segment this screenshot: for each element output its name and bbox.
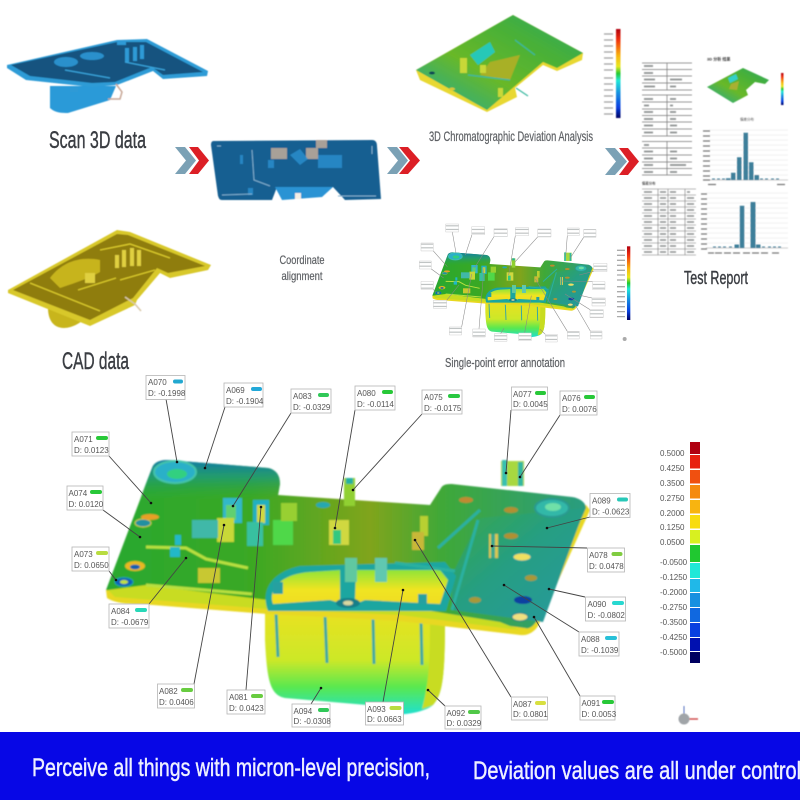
callout: A088 <box>503 584 619 656</box>
table: distribution <box>642 189 696 255</box>
callout: A082 <box>158 524 225 708</box>
chart: main deviation model <box>106 460 590 714</box>
banner <box>0 732 800 800</box>
callout: A073: D: 0.0650 <box>74 561 109 570</box>
scale labels: 0.2750 <box>660 494 685 503</box>
callout: A078: D: 0.0478 <box>589 562 624 571</box>
label: Coordinate alignment: Coordinate <box>280 253 325 267</box>
icon: coordinate triad <box>678 706 698 724</box>
callout: A087: D: 0.0801 <box>513 710 548 719</box>
callout: A083: D: -0.0329 <box>293 403 331 412</box>
callout: A073 <box>72 547 117 581</box>
callout: A082: A082 <box>159 687 178 696</box>
scale labels: -0.2750 <box>660 603 688 612</box>
scale labels: -0.3500 <box>660 618 688 627</box>
callout: A093: A093 <box>367 705 386 714</box>
callout: A094 <box>292 687 331 727</box>
legend: main colour scale <box>660 442 700 663</box>
callout: A080: D: -0.0114 <box>357 400 394 409</box>
callout: A092: D: 0.0329 <box>446 719 482 728</box>
scale labels: -0.1250 <box>660 573 688 582</box>
panel: process flow <box>7 15 788 375</box>
callout: A087: A087 <box>513 700 532 709</box>
callout: A090: D: -0.0802 <box>588 611 625 620</box>
callout: A080 <box>334 386 395 529</box>
callout: A074 <box>67 486 141 538</box>
scale labels <box>660 449 688 657</box>
callout: A078 <box>491 545 624 572</box>
arrow: second chevrons <box>387 147 420 174</box>
callout: A075: A075 <box>424 393 443 402</box>
legend: small colour scale <box>604 29 620 118</box>
label: chart title: 偏差分布 <box>740 116 754 122</box>
heading: Scan 3D data: Scan 3D data <box>49 127 146 154</box>
callout: A080: A080 <box>357 389 376 398</box>
scale labels: 0.0500 <box>660 538 685 547</box>
icon: yellow CAD part <box>8 230 211 328</box>
callout: A091: A091 <box>582 699 601 708</box>
callout: A071: D: 0.0123 <box>74 446 109 455</box>
callout: A076 <box>519 391 597 478</box>
heading: Test Report: Test Report <box>684 268 748 288</box>
callout: A092 <box>427 689 482 729</box>
callout: A084: D: -0.0679 <box>111 618 149 627</box>
label: report model title: 3D 分析 结果 <box>707 56 730 62</box>
callout: A088: A088 <box>581 635 600 644</box>
callout: A094: D: -0.0308 <box>294 717 331 726</box>
callout: A089: D: -0.0623 <box>592 508 630 516</box>
label: distribution table title: 偏差分布 <box>642 180 656 186</box>
chart: single-point annotated model <box>419 224 630 342</box>
callout: A069: D: -0.1904 <box>226 397 264 406</box>
callout: A069 <box>204 383 264 469</box>
chart: histogram one <box>703 130 788 184</box>
table: summary <box>642 63 692 175</box>
callout: A083 <box>232 389 331 507</box>
label: Coordinate alignment: alignment <box>282 269 323 283</box>
heading: CAD data: CAD data <box>62 348 129 375</box>
callout: A074: D: 0.0120 <box>68 500 104 509</box>
scale labels: 0.5000 <box>660 449 685 458</box>
panel: deviation callouts <box>67 376 630 729</box>
callout: A074: A074 <box>68 489 88 498</box>
callout: A075: D: -0.0175 <box>424 404 462 413</box>
chart: top colour deviation model <box>416 15 620 118</box>
icon: blue scanned part <box>7 39 208 113</box>
callout: A073: A073 <box>74 550 93 559</box>
callout: A091 <box>533 616 617 720</box>
callout: A077 <box>505 387 548 474</box>
callout: A088: D: -0.1039 <box>581 646 619 655</box>
label: 3D Chromatographic Deviation Analysis: 3D Chromatographic Deviation Analysis <box>429 128 593 144</box>
callout: A077: D: 0.0045 <box>513 400 548 409</box>
panel: test report <box>642 56 788 255</box>
scale labels: -0.0500 <box>660 558 688 567</box>
icon: report heat-mapped part <box>707 68 784 105</box>
callout: A081: D: 0.0423 <box>229 704 264 713</box>
callout: A090 <box>548 588 626 621</box>
callout: A070: D: -0.1998 <box>148 389 186 398</box>
callout: A084: A084 <box>111 607 130 616</box>
scale labels: 0.1250 <box>660 523 685 532</box>
scale labels: -0.2000 <box>660 588 688 597</box>
callout: A078: A078 <box>589 551 608 560</box>
scale labels: -0.4250 <box>660 633 688 642</box>
callout: A083: A083 <box>293 392 312 401</box>
callout: A076: D: 0.0076 <box>562 405 597 414</box>
callout: A081: A081 <box>229 693 248 702</box>
callout: A087 <box>414 539 548 720</box>
callout: A070 <box>146 376 186 463</box>
callout: A090: A090 <box>588 600 607 609</box>
callout: A081 <box>227 506 265 714</box>
callout: A094: A094 <box>294 707 313 716</box>
callout: A092: A092 <box>446 709 466 718</box>
banner text: left: Perceive all things with micron-level precision, <box>32 754 430 782</box>
callout: A082: D: 0.0406 <box>159 698 194 707</box>
callout: A070: A070 <box>148 378 167 387</box>
callout: A084 <box>109 557 187 628</box>
scale labels: -0.5000 <box>660 648 688 657</box>
callout: A077: A077 <box>513 390 532 399</box>
callout: A069: A069 <box>226 386 245 395</box>
arrow: first chevrons <box>175 147 209 174</box>
callout: A071 <box>72 432 152 504</box>
scale labels: 0.4250 <box>660 464 685 473</box>
callout: A089 <box>546 494 630 529</box>
callout: A093: D: 0.0663 <box>367 715 402 724</box>
icon: aligned blue part <box>211 140 381 200</box>
callout: A093 <box>366 589 404 725</box>
chart: histogram two <box>701 193 788 253</box>
scale labels: 0.2000 <box>660 509 685 518</box>
label: Single-point error annotation: Single-point error annotation <box>445 355 565 370</box>
callout: A075 <box>352 390 462 491</box>
icon: heat-mapped part <box>416 15 583 112</box>
callout: A071: A071 <box>74 435 93 444</box>
callout: A076: A076 <box>562 394 581 403</box>
callout: A091: D: 0.0053 <box>582 710 617 719</box>
callout: A089: A089 <box>592 496 611 506</box>
colour bar <box>690 442 700 663</box>
arrow: third chevrons <box>605 148 639 175</box>
scale labels: 0.3500 <box>660 479 685 488</box>
